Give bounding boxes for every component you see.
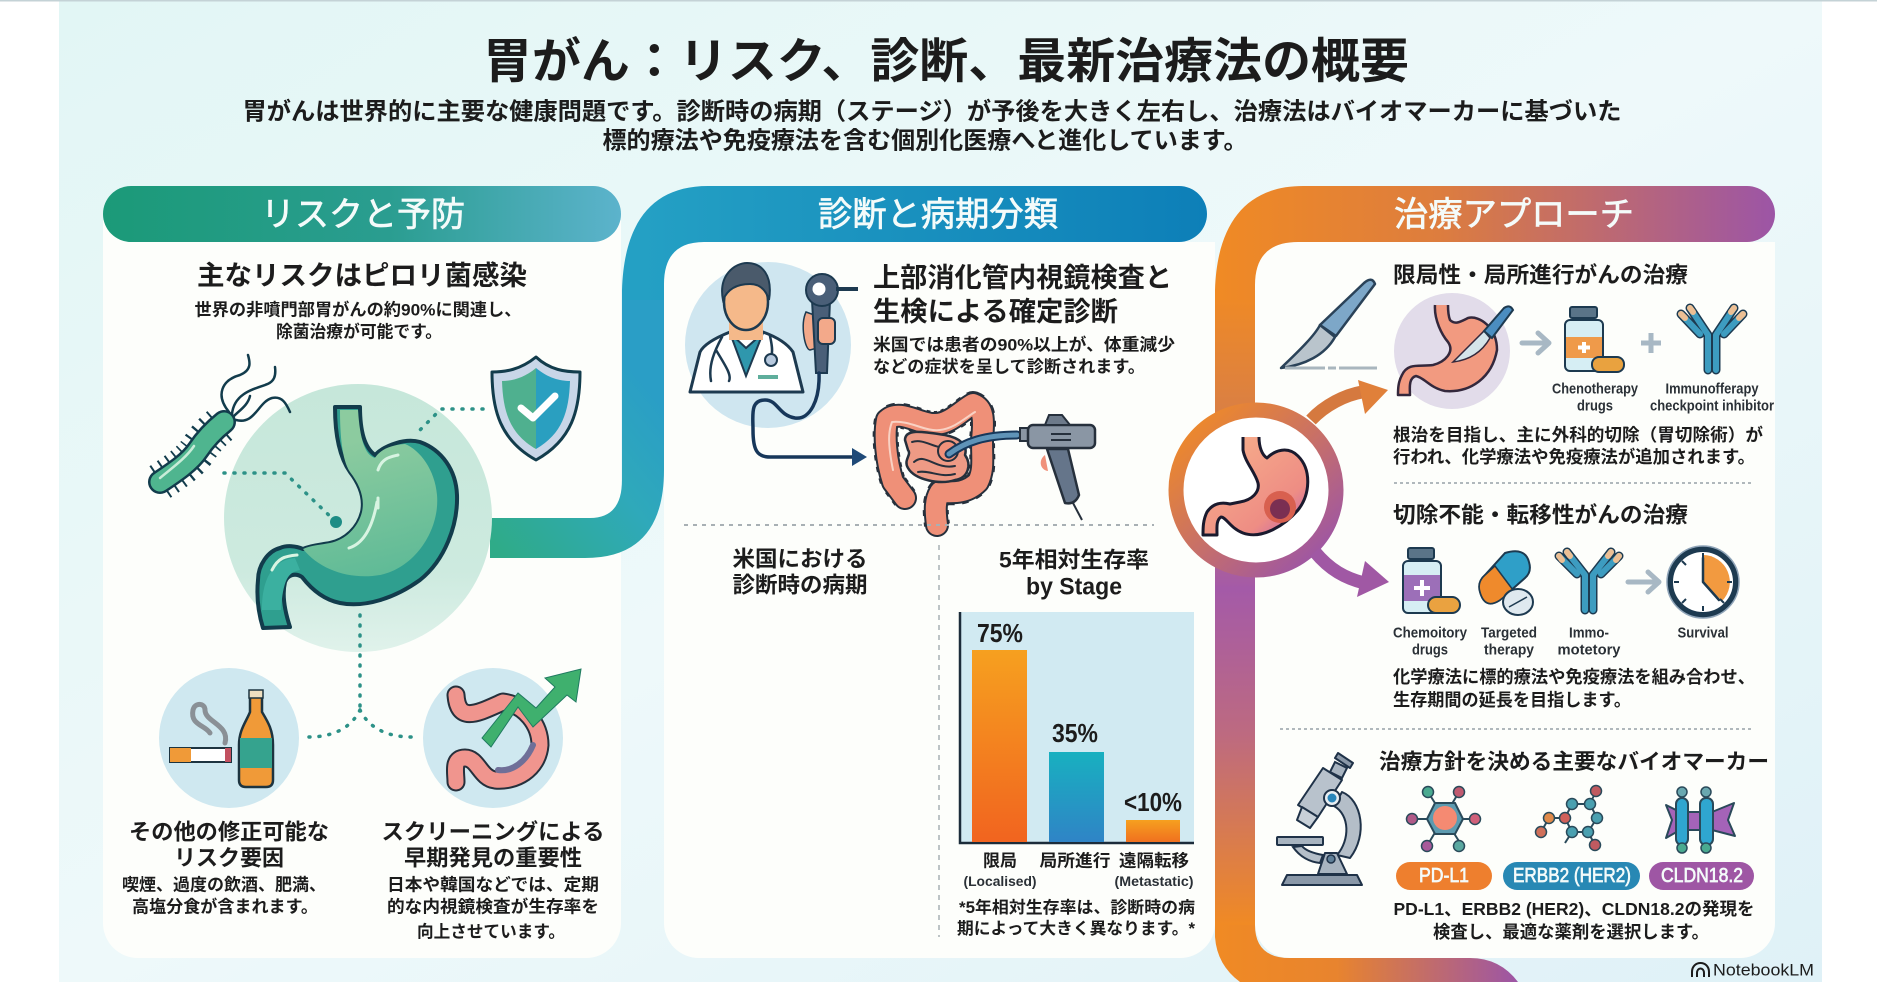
icon: bacterium bbox=[160, 355, 290, 482]
arrow: to localized treatment bbox=[1311, 380, 1388, 420]
text: H. pylori description: 除菌治療が可能です。 bbox=[276, 322, 442, 342]
badge: PD-L1 bbox=[1396, 862, 1492, 890]
labels: localized therapy icons: Immunofferapy bbox=[1666, 380, 1759, 398]
text: screening: 早期発見の重要性 bbox=[404, 846, 582, 870]
dotted connector: bacterium to stomach bbox=[224, 473, 342, 528]
panel: treatment background bbox=[1255, 242, 1775, 958]
text: modifiable risk factors: 喫煙、過度の飲酒、肥満、 bbox=[122, 874, 326, 894]
labels: localized therapy icons bbox=[1552, 380, 1774, 414]
heading: metastatic treatment: 切除不能・転移性がんの治療 bbox=[1393, 502, 1688, 528]
text: chart footnote: *5年相対生存率は、診断時の病 bbox=[959, 897, 1195, 917]
header ribbon: diagnosis and staging bbox=[490, 186, 1207, 558]
arrow: therapy to survival bbox=[1628, 572, 1659, 592]
labels: localized therapy icons: Chenotherapy bbox=[1552, 380, 1639, 398]
panel: treatment content bbox=[1176, 262, 1774, 942]
bar chart: survival by stage: 局所進行 bbox=[1040, 852, 1110, 870]
header ribbon: treatment approach: 治療アプローチ bbox=[1394, 196, 1634, 234]
heading: 5-year survival bbox=[999, 548, 1149, 600]
icon: stomach with tumour in ring bbox=[1176, 410, 1336, 570]
text: modifiable risk factors: 高塩分食が含まれます。 bbox=[132, 896, 318, 916]
heading: stage at diagnosis: 診断時の病期 bbox=[732, 572, 868, 598]
icon: chemotherapy bottle purple bbox=[1403, 548, 1460, 613]
heading: localized treatment: 限局性・局所進行がんの治療 bbox=[1393, 262, 1688, 288]
icon: stomach with upward arrow bbox=[423, 668, 581, 808]
header ribbon: diagnosis and staging: 診断と病期分類 bbox=[818, 196, 1058, 234]
icon: stomach surgery bbox=[1394, 293, 1513, 409]
bar chart: survival by stage: 75% bbox=[977, 618, 1023, 648]
plus sign bbox=[1641, 333, 1661, 353]
icon: targeted therapy capsule bbox=[1479, 551, 1533, 615]
labels: metastatic therapy icons: Survival bbox=[1678, 624, 1728, 642]
labels: localized therapy icons: checkpoint inhibitor bbox=[1650, 398, 1774, 414]
text: metastatic therapy description: 生存期間の延長を目指します。 bbox=[1393, 690, 1631, 710]
text: localized therapy description bbox=[1393, 425, 1764, 467]
subtitle: 胃がんは世界的に主要な健康問題です。診断時の病期（ステージ）が予後を大きく左右し、治療法はバイオマーカーに基づいた bbox=[242, 98, 1622, 126]
labels: metastatic therapy icons bbox=[1393, 624, 1728, 658]
badge: ERBB2 (HER2): ERBB2 (HER2) bbox=[1513, 865, 1631, 887]
icon: antibody bbox=[1681, 308, 1743, 370]
icon: stomach in green circle bbox=[224, 384, 492, 652]
labels: metastatic therapy icons: Immo- bbox=[1569, 624, 1609, 642]
text: chart footnote: 期によって大きく異なります。* bbox=[957, 919, 1196, 938]
text: screening: 日本や韓国などでは、定期 bbox=[387, 876, 599, 894]
bar chart: survival by stage: <10% bbox=[1124, 787, 1182, 817]
icon: PD-L1 molecule bbox=[1406, 786, 1480, 852]
logo: NotebookLM: NotebookLM bbox=[1713, 960, 1814, 980]
icon: microscope bbox=[1277, 753, 1362, 885]
text: modifiable risk factors: リスク要因 bbox=[174, 846, 284, 870]
text: H. pylori description bbox=[194, 300, 522, 342]
bar chart: survival by stage: 35% bbox=[1052, 718, 1098, 748]
text: metastatic therapy description: 化学療法に標的療法や免疫療法を組み合わせ、 bbox=[1393, 667, 1755, 687]
icon: scalpel bbox=[1281, 280, 1377, 368]
icon: shield with check bbox=[492, 357, 580, 460]
icon: colon with endoscope bbox=[886, 404, 1095, 525]
text: diagnosis description: 米国では患者の90%以上が、体重減少 bbox=[873, 334, 1175, 354]
dotted connector: shield to stomach bbox=[417, 409, 483, 433]
arrow: to metastatic treatment bbox=[1315, 552, 1389, 597]
heading: 5-year survival: by Stage bbox=[1026, 574, 1122, 600]
arrow: surgery to chemotherapy bbox=[1522, 333, 1549, 353]
icon: cigarette and bottle bbox=[159, 668, 299, 808]
bar chart: survival by stage: 限局 bbox=[983, 852, 1017, 870]
heading: endoscopy and biopsy bbox=[873, 263, 1172, 327]
icon: chemotherapy bottle bbox=[1565, 307, 1624, 372]
panel: diagnosis content bbox=[684, 262, 1196, 938]
icon: antibody bbox=[1559, 552, 1619, 610]
heading: stage at diagnosis: 米国における bbox=[732, 546, 868, 572]
text: screening bbox=[382, 820, 604, 942]
text: modifiable risk factors bbox=[122, 820, 329, 916]
icon: survival clock bbox=[1667, 546, 1739, 618]
bar chart: survival by stage: (Localised) bbox=[964, 873, 1036, 889]
heading: stage at diagnosis bbox=[732, 546, 868, 598]
bar chart: survival by stage bbox=[960, 612, 1194, 889]
text: screening: スクリーニングによる bbox=[382, 820, 604, 844]
icon: doctor with endoscope bbox=[685, 262, 867, 466]
heading: endoscopy and biopsy: 上部消化管内視鏡検査と bbox=[873, 263, 1172, 293]
header: risk and prevention bbox=[103, 186, 621, 242]
badge: PD-L1: PD-L1 bbox=[1419, 865, 1469, 887]
labels: metastatic therapy icons: motetory bbox=[1558, 642, 1621, 658]
text: localized therapy description: 根治を目指し、主に外科的切除（胃切除術）が bbox=[1393, 425, 1764, 445]
icon: ERBB2 molecule bbox=[1536, 786, 1602, 850]
text: chart footnote bbox=[957, 897, 1196, 938]
heading: endoscopy and biopsy: 生検による確定診断 bbox=[873, 297, 1118, 327]
text: modifiable risk factors: その他の修正可能な bbox=[129, 820, 329, 844]
text: diagnosis description: などの症状を呈して診断されます。 bbox=[873, 358, 1145, 376]
bar chart: survival by stage: (Metastatic) bbox=[1114, 873, 1194, 889]
panel: diagnosis background bbox=[664, 242, 1215, 958]
badge: CLDN18.2 bbox=[1649, 862, 1754, 890]
header ribbon: treatment approach bbox=[1215, 186, 1775, 982]
labels: metastatic therapy icons: therapy bbox=[1484, 642, 1535, 658]
labels: metastatic therapy icons: Targeted bbox=[1481, 624, 1537, 642]
text: biomarker description bbox=[1394, 899, 1754, 942]
text: localized therapy description: 行われ、化学療法や免疫療法が追加されます。 bbox=[1393, 447, 1755, 467]
subtitle bbox=[242, 98, 1622, 154]
text: biomarker description: 検査し、最適な薬剤を選択します。 bbox=[1433, 922, 1709, 942]
heading: 5-year survival: 5年相対生存率 bbox=[999, 548, 1149, 572]
text: metastatic therapy description bbox=[1393, 667, 1755, 710]
panel: risk content bbox=[122, 261, 604, 942]
badge: ERBB2 (HER2) bbox=[1503, 862, 1640, 890]
dotted connector: stomach to small icons bbox=[309, 615, 412, 737]
text: H. pylori description: 世界の非噴門部胃がんの約90%に関連し、 bbox=[194, 300, 522, 320]
labels: metastatic therapy icons: Chemoitory bbox=[1393, 624, 1468, 642]
icon: CLDN18.2 molecule bbox=[1666, 787, 1735, 853]
labels: metastatic therapy icons: drugs bbox=[1412, 642, 1448, 658]
text: screening: 的な内視鏡検査が生存率を bbox=[387, 896, 599, 916]
badge: CLDN18.2: CLDN18.2 bbox=[1661, 865, 1743, 887]
text: biomarker description: PD-L1、ERBB2 (HER2)、CLDN18.2の発現を bbox=[1394, 899, 1754, 919]
title: 胃がん：リスク、診断、最新治療法の概要 bbox=[483, 36, 1409, 88]
labels: localized therapy icons: drugs bbox=[1577, 398, 1613, 414]
heading: biomarkers: 治療方針を決める主要なバイオマーカー bbox=[1379, 750, 1769, 774]
heading: H. pylori: 主なリスクはピロリ菌感染 bbox=[197, 261, 527, 291]
subtitle: 標的療法や免疫療法を含む個別化医療へと進化しています。 bbox=[602, 128, 1248, 154]
panel: risk and prevention background bbox=[103, 220, 621, 958]
bar chart: survival by stage: 遠隔転移 bbox=[1119, 852, 1189, 870]
text: diagnosis description bbox=[873, 334, 1175, 376]
text: screening: 向上させています。 bbox=[417, 922, 565, 942]
header: risk and prevention: リスクと予防 bbox=[261, 196, 465, 234]
